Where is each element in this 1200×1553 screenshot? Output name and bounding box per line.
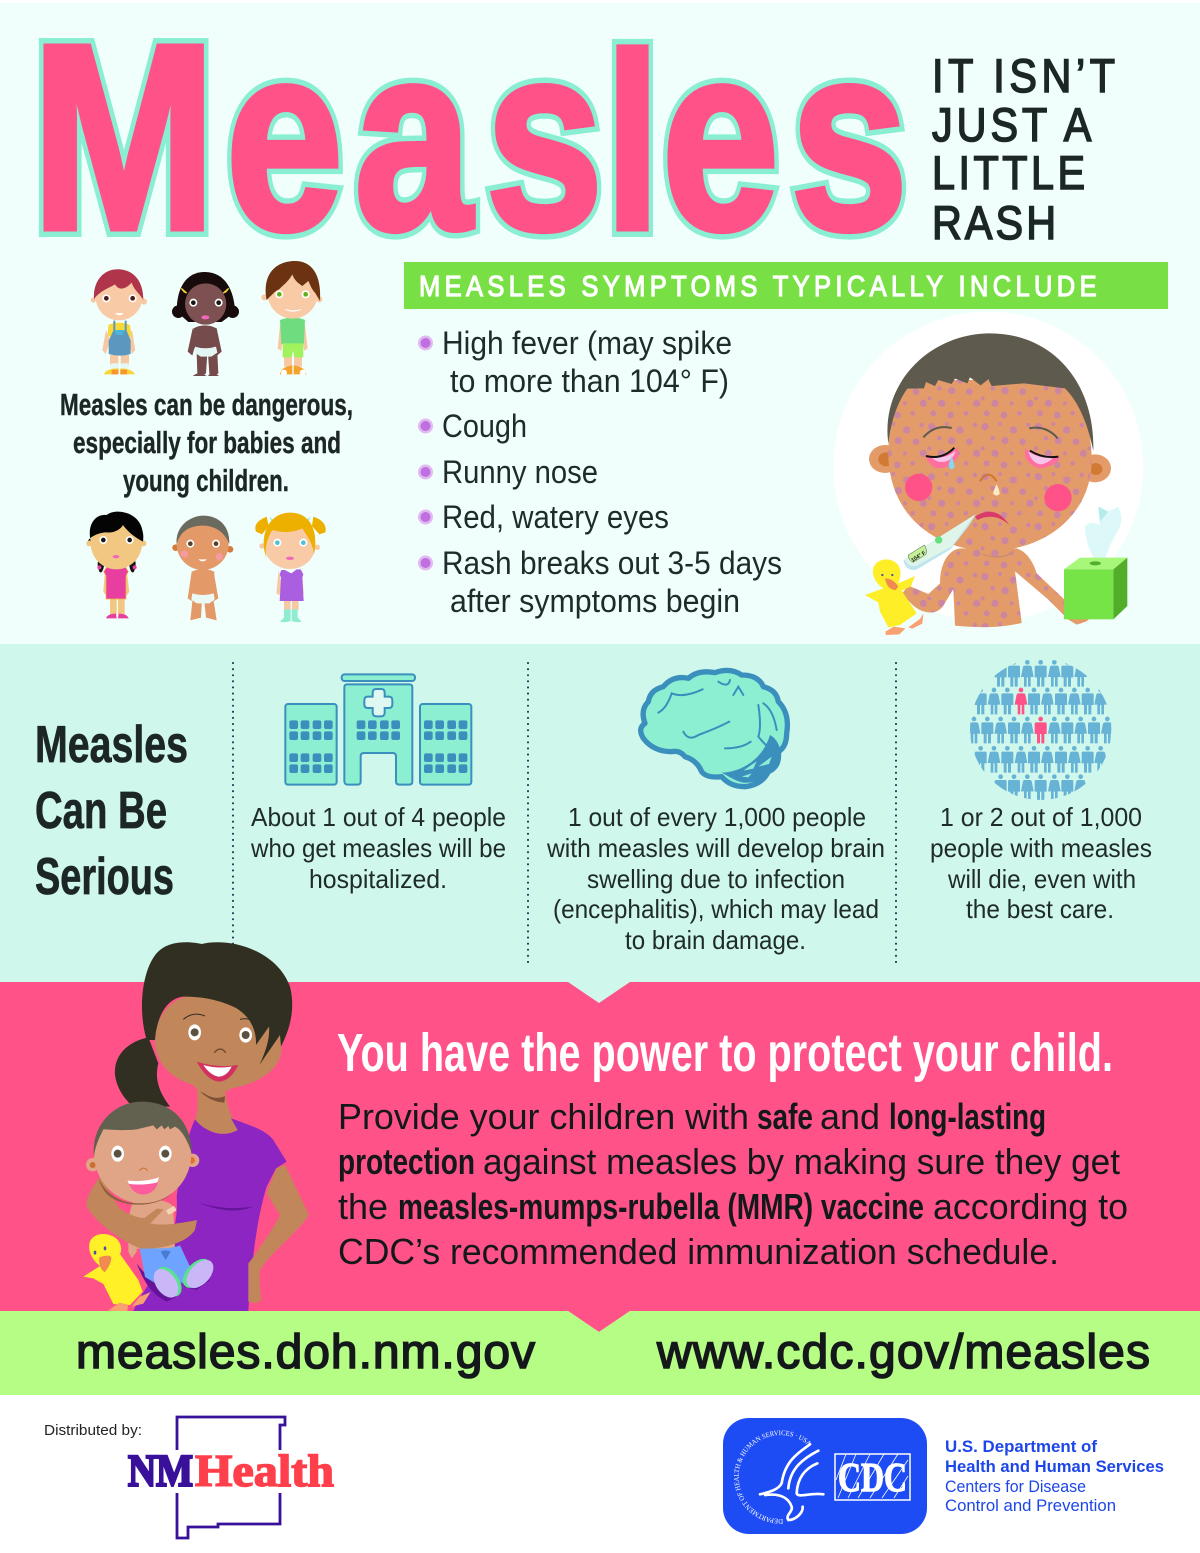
symptom list: Runny nose bbox=[442, 454, 598, 490]
subtitle: IT ISN’T bbox=[932, 51, 1115, 103]
body text: MMR vaccine: and bbox=[820, 1096, 880, 1137]
child: red hair bbox=[91, 269, 147, 374]
symptom list: High fever (may spike bbox=[442, 325, 732, 361]
text: encephalitis statistic: to brain damage. bbox=[625, 925, 806, 955]
child: boy in diaper bbox=[172, 516, 233, 620]
subtitle: RASH bbox=[932, 198, 1056, 250]
logo: HHS and CDC badge bbox=[723, 1418, 927, 1534]
mother left arm bbox=[86, 1177, 197, 1249]
logo: HHS and CDC badge: DEPARTMENT OF HEALTH & HUMAN SERVICES · USA bbox=[734, 1430, 810, 1524]
logo: HHS and CDC badge: CDC bbox=[838, 1454, 907, 1500]
face details bbox=[905, 427, 1072, 525]
head with rash bbox=[888, 380, 1092, 551]
baby shoes bbox=[149, 1254, 219, 1302]
tissue box bbox=[1064, 507, 1127, 619]
symptom list: Rash breaks out 3-5 days bbox=[442, 545, 782, 581]
credit: distributed by: Distributed by: bbox=[44, 1422, 142, 1439]
heading: Measles can be serious bbox=[35, 716, 188, 906]
text: death statistic: people with measles bbox=[930, 833, 1152, 863]
body text: MMR vaccine bbox=[338, 1096, 1128, 1272]
illustration: sick boy with rash bbox=[833, 312, 1143, 635]
text: hospitalized statistic: About 1 out of 4 people bbox=[251, 802, 506, 832]
text: death statistic bbox=[930, 802, 1152, 924]
baby head bbox=[86, 1102, 199, 1205]
child: boy green shirt bbox=[261, 261, 322, 376]
text: encephalitis statistic: 1 out of every 1,000 people bbox=[568, 802, 866, 832]
text: dangerous for children bbox=[60, 387, 353, 498]
symptom list: after symptoms begin bbox=[450, 583, 740, 619]
text: US Department of Health and Human Services: Health and Human Services bbox=[945, 1457, 1164, 1476]
hair bbox=[887, 333, 1093, 451]
link: CDC measles site: www.cdc.gov/measles bbox=[656, 1326, 1150, 1379]
mother face details bbox=[183, 1014, 254, 1082]
symptom list: to more than 104° F) bbox=[450, 363, 729, 399]
panel: green links bar bbox=[0, 1311, 1200, 1395]
panel: children illustrations bbox=[86, 261, 326, 622]
heading: Measles can be serious: Can Be bbox=[35, 782, 167, 840]
rubber duck bbox=[865, 559, 923, 635]
illustration: mother and baby bbox=[83, 942, 309, 1311]
mother hair bbox=[142, 942, 292, 1065]
mother face bbox=[155, 995, 282, 1094]
subtitle: LITTLE bbox=[932, 148, 1085, 200]
text: dangerous for children: especially for babies and bbox=[73, 425, 341, 460]
subtitle bbox=[932, 51, 1115, 250]
body text: MMR vaccine: CDC’s recommended immunization schedule. bbox=[338, 1231, 1059, 1272]
body and arms bbox=[902, 548, 1095, 627]
ponytail bbox=[115, 1037, 170, 1107]
child: dark hair girl bbox=[172, 272, 239, 376]
thermometer: 104° F bbox=[910, 550, 928, 564]
body text: MMR vaccine: measles-mumps-rubella (MMR) vaccine bbox=[398, 1186, 924, 1227]
mother right arm bbox=[248, 1165, 309, 1303]
logo: NMHealth: Health bbox=[195, 1446, 334, 1496]
rubber duck bbox=[83, 1234, 151, 1311]
text: encephalitis statistic bbox=[546, 802, 885, 955]
white circle backdrop bbox=[833, 312, 1143, 622]
body text: MMR vaccine: against measles by making sure they get bbox=[483, 1141, 1120, 1182]
logo: NMHealth bbox=[128, 1417, 334, 1538]
background: serious section bbox=[0, 644, 1200, 1006]
body text: MMR vaccine: Provide your children with bbox=[338, 1096, 749, 1137]
text: death statistic: 1 or 2 out of 1,000 bbox=[940, 802, 1142, 832]
text: encephalitis statistic: swelling due to infection bbox=[587, 864, 845, 894]
child: girl pink dress bbox=[86, 512, 146, 618]
text: US Department of Health and Human Services: Control and Prevention bbox=[945, 1496, 1116, 1515]
body text: MMR vaccine: safe bbox=[757, 1096, 813, 1137]
icon: crowd of people bbox=[968, 660, 1114, 801]
mother neck bbox=[195, 1085, 238, 1134]
banner: symptoms heading bbox=[404, 262, 1168, 309]
text: hospitalized statistic: who get measles will be bbox=[250, 833, 506, 863]
baby body bbox=[128, 1200, 210, 1302]
subtitle: JUST A bbox=[932, 100, 1092, 152]
text: encephalitis statistic: with measles will develop brain bbox=[546, 833, 885, 863]
body text: MMR vaccine: long-lasting bbox=[889, 1096, 1046, 1137]
icon: brain bbox=[641, 670, 787, 787]
body text: MMR vaccine: the bbox=[338, 1186, 388, 1227]
heading: Measles can be serious: Measles bbox=[35, 716, 188, 774]
body text: MMR vaccine: protection bbox=[338, 1141, 475, 1182]
mother shirt bbox=[133, 1118, 287, 1311]
symptom list: Red, watery eyes bbox=[442, 499, 669, 535]
text: death statistic: the best care. bbox=[966, 894, 1114, 924]
panel: pink protect section bbox=[0, 982, 1200, 1332]
child: blonde girl purple dress bbox=[255, 513, 326, 622]
text: hospitalized statistic bbox=[250, 802, 506, 894]
symptom list bbox=[418, 325, 782, 619]
text: death statistic: will die, even with bbox=[947, 864, 1136, 894]
background: top section bbox=[0, 3, 1200, 644]
body text: MMR vaccine: according to bbox=[933, 1186, 1128, 1227]
text: dangerous for children: Measles can be dangerous, bbox=[60, 387, 353, 422]
link: New Mexico measles site: measles.doh.nm.gov bbox=[76, 1326, 535, 1379]
icon: hospital bbox=[285, 674, 471, 785]
text: US Department of Health and Human Services: Centers for Disease bbox=[945, 1477, 1086, 1496]
text: encephalitis statistic: (encephalitis), which may lead bbox=[553, 894, 879, 924]
ears bbox=[869, 445, 1111, 482]
thermometer bbox=[903, 514, 976, 570]
logo: NMHealth: NM bbox=[128, 1446, 193, 1496]
banner: symptoms heading: MEASLES SYMPTOMS TYPICALLY INCLUDE bbox=[419, 269, 1097, 302]
heading: Measles can be serious: Serious bbox=[35, 848, 174, 906]
text: US Department of Health and Human Services: U.S. Department of bbox=[945, 1437, 1097, 1456]
text: hospitalized statistic: hospitalized. bbox=[309, 864, 447, 894]
text: dangerous for children: young children. bbox=[123, 463, 289, 498]
text: US Department of Health and Human Services bbox=[945, 1437, 1164, 1515]
symptom list: Cough bbox=[442, 408, 527, 444]
